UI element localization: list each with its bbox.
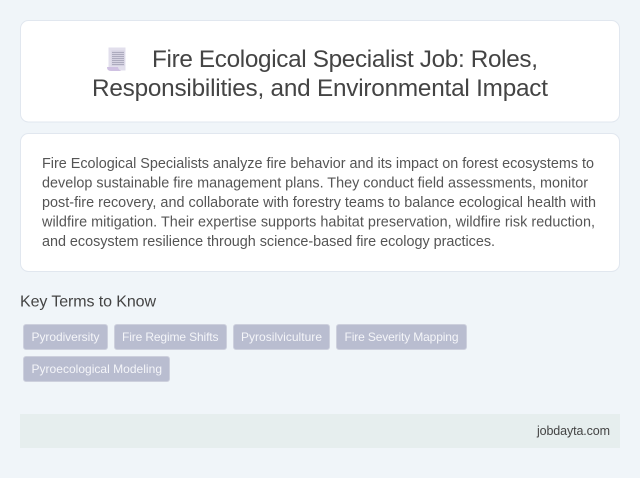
tag: Pyrosilviculture: [234, 324, 330, 350]
description text: Fire Ecological Specialists analyze fire behavior and its impact on forest ecosystems to: [42, 156, 594, 172]
footer bar: [20, 414, 620, 448]
tag: Pyroecological Modeling: [24, 356, 170, 382]
title: [92, 46, 548, 102]
title: Responsibilities, and Environmental Impact: [92, 75, 548, 102]
description text: and ecosystem resilience through science-based fire ecology practices.: [42, 234, 495, 250]
heading: key terms: Key Terms to Know: [20, 294, 156, 310]
tag: Fire Severity Mapping: [336, 324, 466, 350]
panel: title card: [20, 20, 620, 122]
description text: wildfire mitigation. Their expertise supports habitat preservation, wildfire risk reduction,: [41, 214, 595, 230]
tag list: [24, 324, 466, 382]
tag: Pyrodiversity: Pyrodiversity: [32, 330, 100, 344]
tag: Pyrosilviculture: Pyrosilviculture: [241, 330, 322, 344]
tag: Fire Severity Mapping: Fire Severity Mapping: [344, 330, 458, 344]
panel: description: [20, 134, 620, 272]
description text: [41, 156, 596, 250]
tag: Pyroecological Modeling: Pyroecological Modeling: [32, 362, 162, 376]
description text: develop sustainable fire management plans. They conduct field assessments, monitor: [42, 176, 588, 192]
footer source text: jobdayta.com: [536, 424, 610, 438]
icon: receipt scroll: [107, 48, 126, 71]
tag: Pyrodiversity: [24, 324, 108, 350]
tag: Fire Regime Shifts: [114, 324, 226, 350]
description text: post-fire recovery, and collaborate with forestry teams to balance ecological health with: [42, 195, 596, 211]
tag: Fire Regime Shifts: Fire Regime Shifts: [122, 330, 218, 344]
title: Fire Ecological Specialist Job: Roles,: [152, 46, 538, 73]
